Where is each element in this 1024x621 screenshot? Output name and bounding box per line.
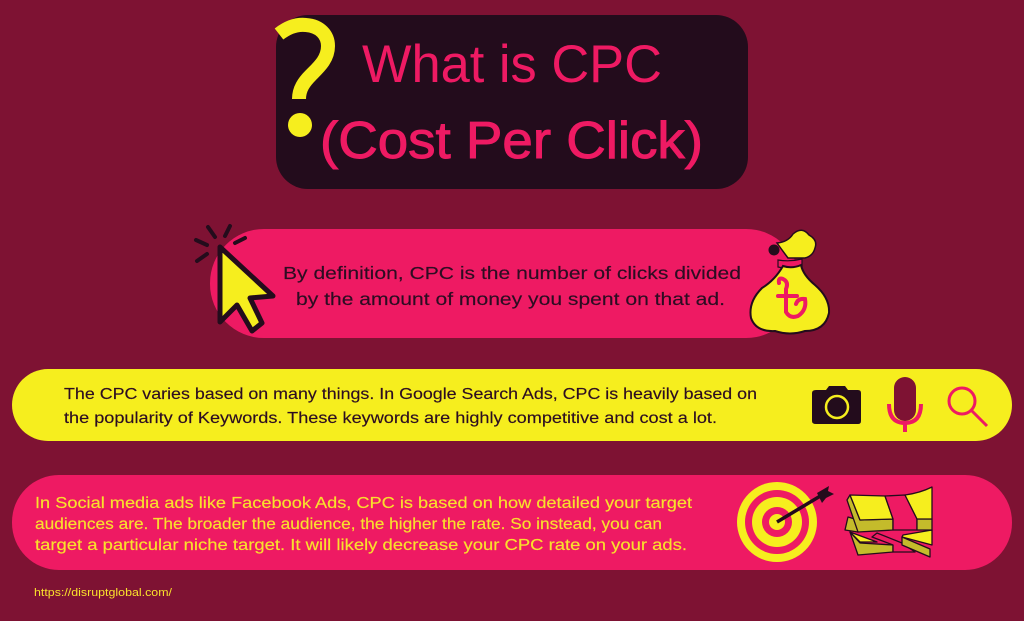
icon: target with dart bbox=[737, 482, 834, 562]
text: google search ads: The CPC varies based on many things. In Google Search Ads, CPC is heavily based on bbox=[64, 386, 757, 403]
text: social media ads bbox=[35, 495, 693, 554]
icon: stack of money bbox=[845, 487, 932, 557]
panel: title bbox=[276, 15, 748, 189]
panel: social media ads bbox=[12, 475, 1012, 570]
icon: money bag bbox=[750, 230, 829, 334]
heading: Cost Per Click: (Cost Per Click) bbox=[320, 112, 703, 170]
icon: camera bbox=[812, 386, 861, 424]
text: definition: by the amount of money you spent on that ad. bbox=[296, 289, 725, 309]
text: source url: https://disruptglobal.com/ bbox=[34, 587, 173, 599]
text: social media ads: In Social media ads like Facebook Ads, CPC is based on how detailed your target bbox=[35, 495, 693, 512]
text: definition bbox=[283, 263, 741, 309]
heading: What is CPC: What is CPC bbox=[362, 35, 662, 94]
panel: google search ads bbox=[12, 369, 1012, 441]
icon: question mark bbox=[279, 25, 328, 137]
icon: cursor with click rays bbox=[196, 226, 273, 331]
icon: microphone bbox=[889, 377, 921, 432]
icon: magnifying glass bbox=[949, 388, 987, 426]
text: social media ads: target a particular niche target. It will likely decrease your CPC rate on your ads. bbox=[35, 537, 687, 554]
text: social media ads: audiences are. The broader the audience, the higher the rate. So instead, you can bbox=[35, 516, 662, 533]
text: google search ads: the popularity of Keywords. These keywords are highly competitive and cost a lot. bbox=[64, 410, 717, 427]
text: google search ads bbox=[64, 386, 757, 427]
text: definition: By definition, CPC is the number of clicks divided bbox=[283, 263, 741, 283]
panel: definition bbox=[196, 226, 829, 338]
